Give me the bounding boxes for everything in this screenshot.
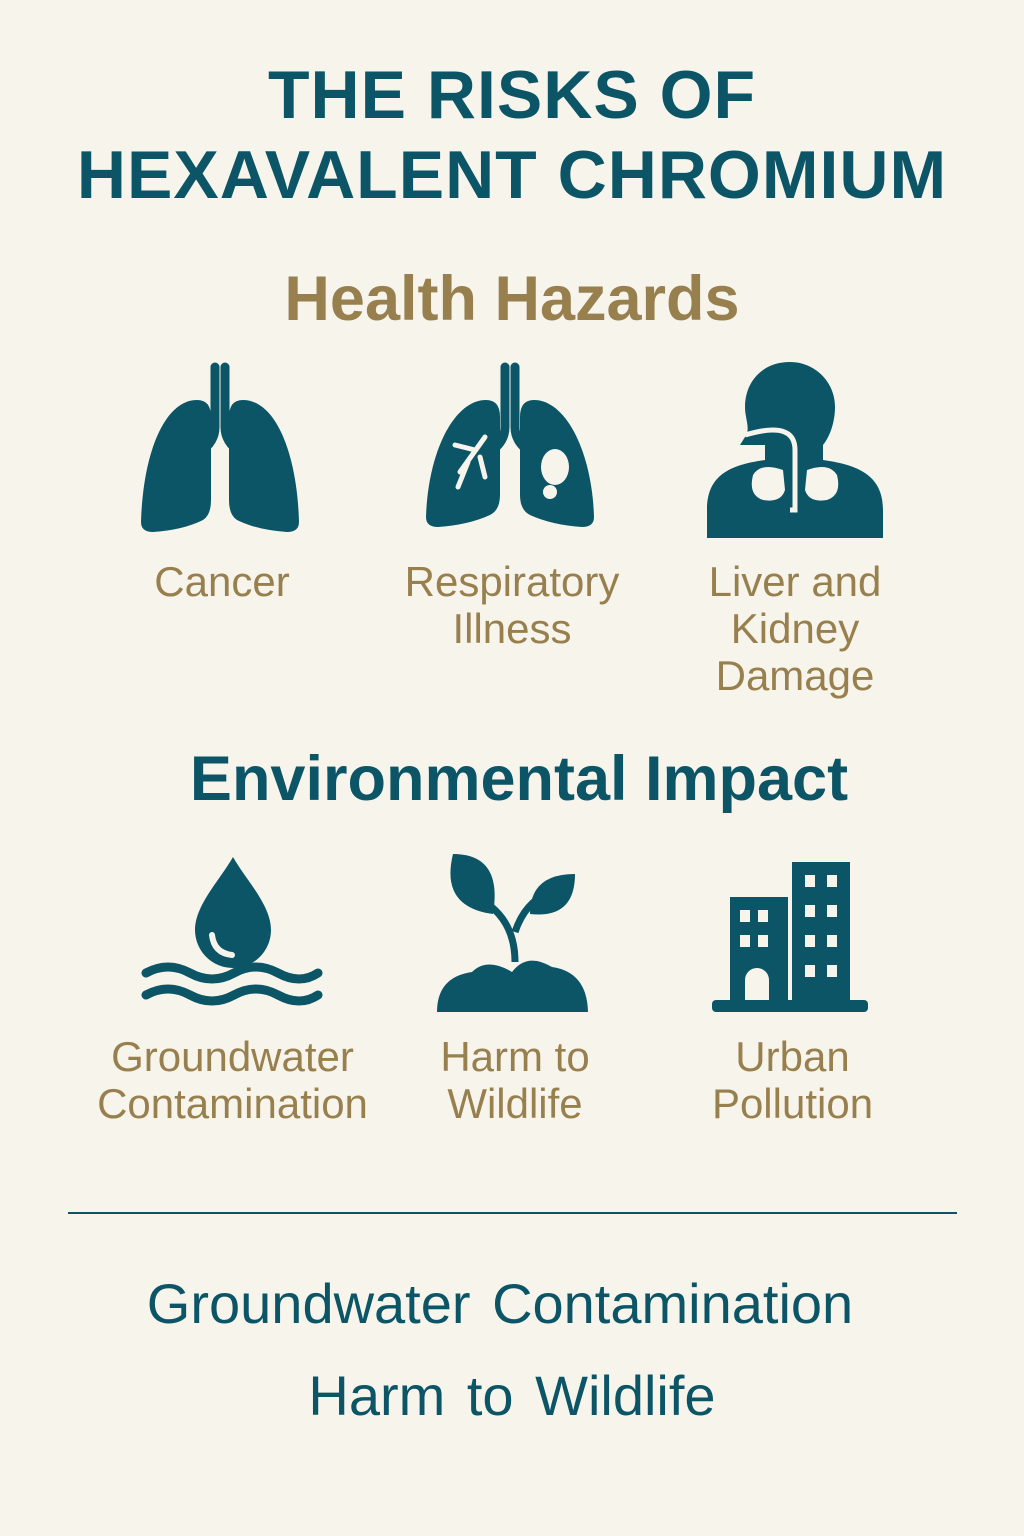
label: groundwater: Groundwater	[111, 1033, 354, 1080]
label: wildlife	[440, 1033, 590, 1127]
label: liver kidney: Liver and	[709, 558, 881, 605]
icon: human torso	[706, 362, 883, 538]
label: respiratory: Illness	[452, 605, 572, 652]
heading: environmental impact: Environmental Impact	[190, 744, 848, 814]
icon: buildings	[712, 862, 868, 1012]
label: liver kidney: Damage	[716, 652, 874, 699]
label: groundwater	[97, 1033, 368, 1127]
label: liver kidney	[709, 558, 881, 699]
label: wildlife: Harm to	[440, 1033, 590, 1080]
bottom text: wildlife: Harm to Wildlife	[308, 1364, 716, 1427]
title	[77, 57, 947, 213]
label: urban: Urban	[735, 1033, 850, 1080]
label: urban	[712, 1033, 873, 1127]
heading: health hazards: Health Hazards	[284, 264, 740, 334]
icon: plant sprout	[437, 854, 588, 1012]
icon: lungs (cancer)	[141, 362, 299, 532]
label: liver kidney: Kidney	[731, 605, 859, 652]
title: THE RISKS OF	[268, 57, 756, 133]
label: urban: Pollution	[712, 1080, 873, 1127]
bottom text: groundwater: Groundwater Contamination	[147, 1272, 853, 1335]
label: respiratory	[405, 558, 620, 652]
icon: lungs (respiratory)	[426, 362, 594, 527]
label: wildlife: Wildlife	[447, 1080, 583, 1127]
icon: water drop and waves	[142, 857, 322, 1006]
label: groundwater: Contamination	[97, 1080, 368, 1127]
title: HEXAVALENT CHROMIUM	[77, 137, 947, 213]
label: cancer: Cancer	[154, 558, 290, 605]
label: respiratory: Respiratory	[405, 558, 619, 605]
